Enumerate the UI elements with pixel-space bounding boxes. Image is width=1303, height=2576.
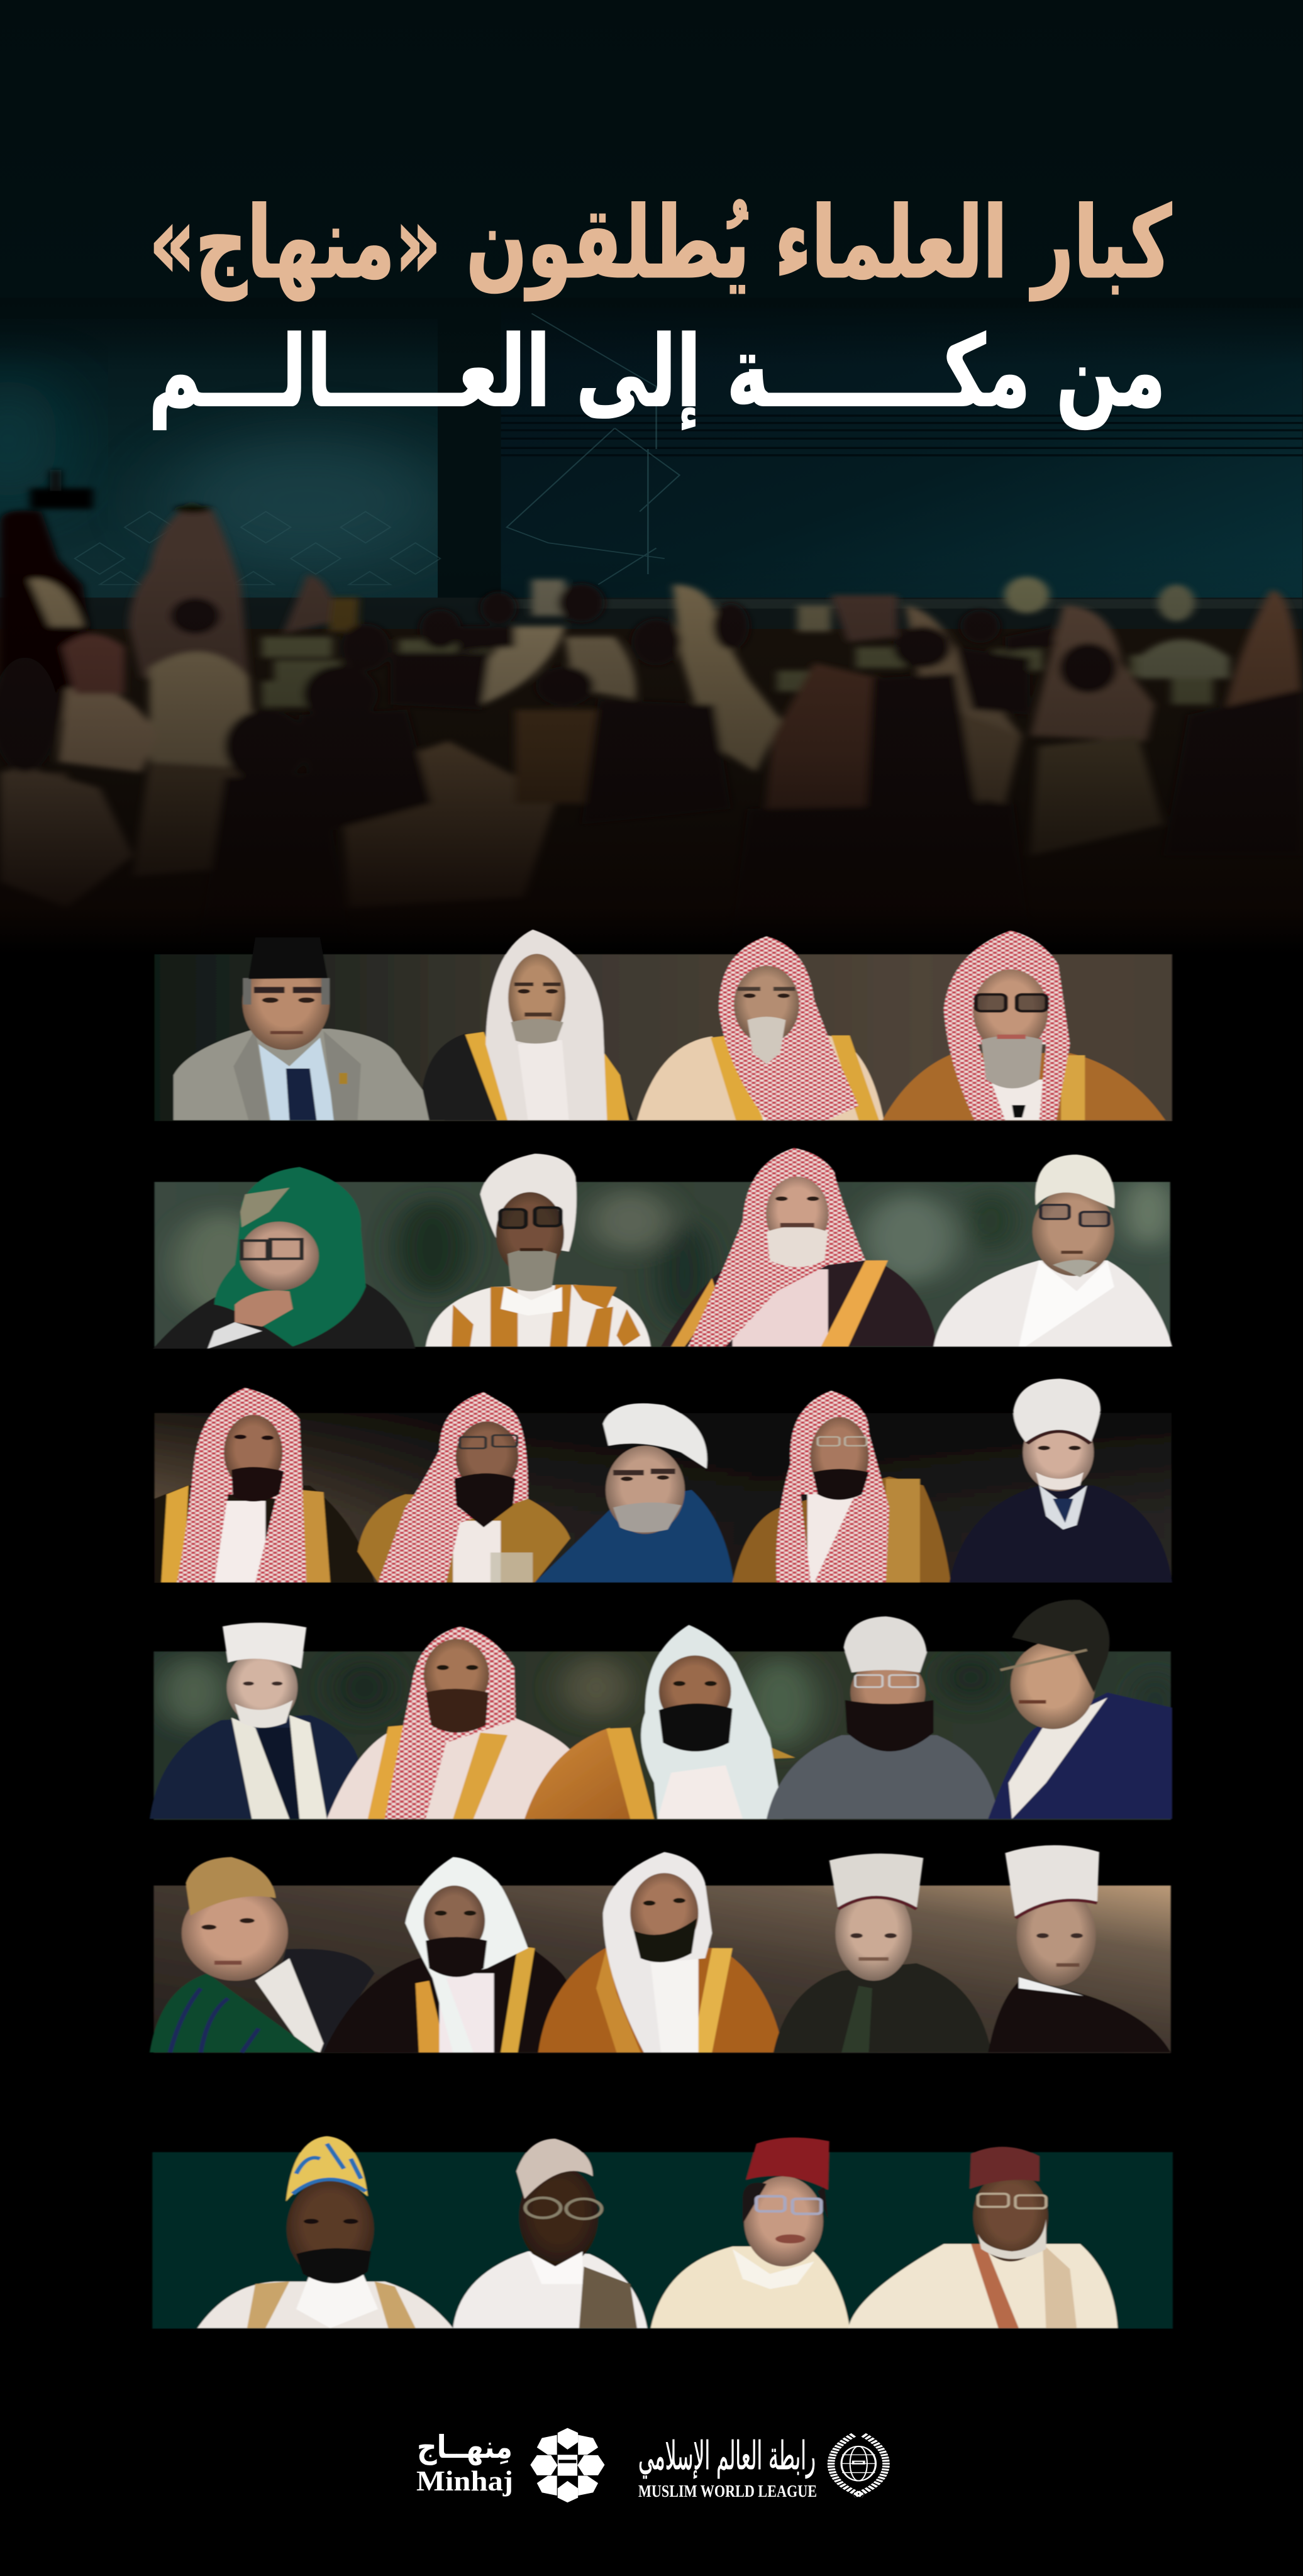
- title: [148, 186, 1172, 430]
- logo: Muslim World League wordmark: [638, 2433, 817, 2501]
- portrait: scholar in white turban with long black beard: [767, 1616, 999, 1819]
- standing man: [129, 504, 249, 679]
- logo: Minhaj wordmark: Minhaj: [416, 2465, 513, 2497]
- row 6 backdrop: [152, 2152, 1173, 2329]
- portrait: scholar in blue and yellow cap: [197, 2136, 453, 2328]
- portrait: scholar in red ghutra and dark bisht: [661, 1148, 937, 1346]
- icon: Minhaj flower emblem: [530, 2428, 605, 2502]
- portrait: scholar in beige cap with glasses: [453, 2139, 647, 2328]
- portrait: elder in red ghutra and glasses: [882, 930, 1165, 1120]
- stage screens and audience: [0, 298, 1302, 943]
- lower fade to black: [0, 553, 1303, 955]
- portrait: scholar in white turban and navy coat: [949, 1379, 1172, 1582]
- row 1 backdrop: [155, 954, 1172, 1121]
- portrait: scholar in tan cap and green shawl: [150, 1857, 375, 2053]
- portrait: scholar with black beard in red ghutra: [358, 1392, 570, 1582]
- portrait: man in red fez and cream djellaba: [651, 2138, 850, 2328]
- portrait: scholar in red ghutra left: [155, 1387, 375, 1582]
- seats: [262, 636, 1221, 707]
- portrait: man in grey suit and black cap: [174, 938, 445, 1120]
- portrait: scholar in white kufi and thobe: [934, 1155, 1172, 1346]
- row 2 backdrop: [155, 1182, 1170, 1347]
- portrait: scholar in red ghutra and cream bisht: [637, 936, 884, 1120]
- portrait: scholar in white ghutra and orange bisht: [538, 1852, 784, 2053]
- portrait: scholar in white hat and scarf: [150, 1623, 361, 1819]
- icon: Muslim World League globe and laurel: [831, 2435, 886, 2496]
- logo: Muslim World League wordmark: MUSLIM WORLD LEAGUE: [638, 2482, 817, 2501]
- photographer and camera: [0, 510, 100, 752]
- portrait: scholar in white turban with orange trim: [426, 1153, 651, 1346]
- panel: background event photo: [0, 0, 1303, 955]
- panel: portraits rows 1 to 3: [153, 930, 1172, 1582]
- dark heads and bodies: [0, 583, 1302, 943]
- logo: Minhaj wordmark: [416, 2429, 513, 2497]
- portrait: man in navy suit with glasses: [988, 1600, 1172, 1819]
- portrait: elder in maroon cap and cream robe: [848, 2146, 1117, 2328]
- portrait: scholar with brown beard in red ghutra: [327, 1626, 572, 1819]
- panel: portraits rows 4 to 6: [150, 1600, 1175, 2329]
- logo: Muslim World League wordmark: رابطة العالم الإسلامي: [638, 2433, 816, 2479]
- portrait: scholar in green turban: [153, 1167, 416, 1348]
- row 5 backdrop: [153, 1885, 1171, 2053]
- row 4 backdrop: [153, 1652, 1171, 1820]
- portrait: scholar in white turban and blue jacket: [535, 1403, 734, 1582]
- portrait: scholar in white ghutra and orange bisht: [524, 1625, 795, 1819]
- portrait: scholar in white ghutra and black bisht: [423, 930, 634, 1120]
- logo: Minhaj wordmark: مِنهــاج: [417, 2429, 513, 2466]
- portrait: imam in tall white hat in profile: [988, 1845, 1171, 2053]
- portrait: imam in white hat and dark robe: [773, 1853, 992, 2053]
- audience robes lit: [150, 652, 258, 788]
- portrait: scholar in red ghutra with brown bisht: [733, 1391, 951, 1582]
- portrait: scholar in white ghutra and black bisht: [323, 1857, 569, 2053]
- logos footer: [416, 2428, 886, 2502]
- row 3 backdrop: [155, 1413, 1172, 1582]
